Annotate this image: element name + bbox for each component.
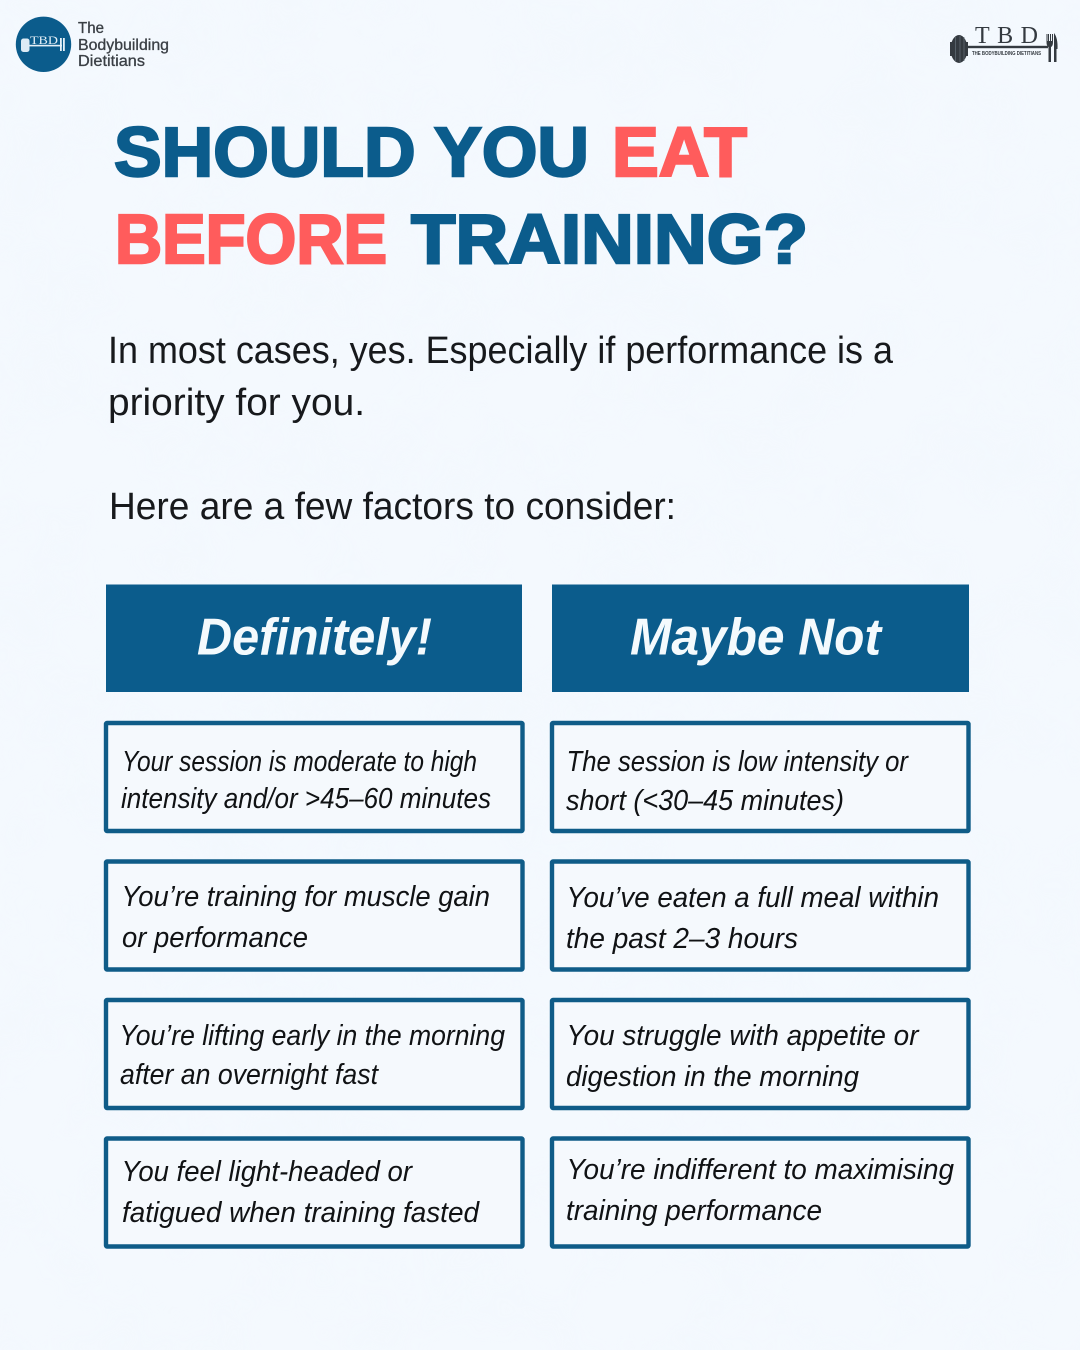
card: lifting early in the morning: after an overnight fast bbox=[120, 1059, 380, 1091]
card: low intensity or short bbox=[552, 723, 968, 831]
logo: TBD barbell wordmark: TBD bbox=[975, 23, 1038, 49]
card: light-headed or fatigued: fatigued when training fasted bbox=[122, 1197, 480, 1229]
lead-in line: Here are a few factors to consider: bbox=[109, 486, 676, 528]
title: EAT bbox=[612, 113, 747, 191]
logo: TBD barbell wordmark: THE BODYBUILDING DIETITIANS bbox=[972, 51, 1041, 57]
column header: Definitely!: Definitely! bbox=[197, 608, 432, 666]
logo: The Bodybuilding Dietitians badge: Dietitians bbox=[78, 53, 145, 70]
card: appetite or digestion bbox=[552, 1000, 968, 1108]
card: moderate to high intensity bbox=[106, 723, 522, 831]
title bbox=[114, 113, 808, 278]
column header: Maybe Not bbox=[552, 584, 969, 692]
card: appetite or digestion: You struggle with appetite or bbox=[566, 1020, 920, 1052]
card: low intensity or short: The session is low intensity or bbox=[566, 746, 909, 778]
logo: The Bodybuilding Dietitians badge: Bodybuilding bbox=[78, 37, 169, 54]
card: low intensity or short: short (<30–45 minutes) bbox=[566, 785, 844, 817]
card: eaten a full meal: You’ve eaten a full meal within bbox=[566, 882, 939, 914]
card: light-headed or fatigued bbox=[106, 1138, 522, 1246]
card: eaten a full meal bbox=[552, 862, 968, 970]
card: muscle gain or performance: or performance bbox=[122, 922, 308, 954]
card: muscle gain or performance bbox=[106, 862, 522, 970]
card: indifferent to performance: training performance bbox=[566, 1195, 822, 1227]
card: lifting early in the morning: You’re lifting early in the morning bbox=[120, 1020, 505, 1052]
card: indifferent to performance: You’re indifferent to maximising bbox=[566, 1154, 954, 1186]
logo: The Bodybuilding Dietitians badge: The bbox=[78, 20, 104, 37]
title: SHOULD YOU bbox=[114, 113, 589, 191]
card: muscle gain or performance: You’re training for muscle gain bbox=[122, 881, 490, 913]
card: appetite or digestion: digestion in the morning bbox=[566, 1061, 859, 1093]
title: BEFORE bbox=[115, 200, 387, 278]
intro paragraph: In most cases, yes. Especially if performance is a bbox=[108, 330, 894, 372]
logo: TBD barbell wordmark bbox=[950, 23, 1058, 63]
card: moderate to high intensity: intensity and/or >45–60 minutes bbox=[121, 783, 491, 815]
intro paragraph bbox=[108, 330, 894, 424]
card: lifting early in the morning bbox=[106, 1000, 522, 1108]
column header: Maybe Not: Maybe Not bbox=[630, 608, 884, 666]
logo: The Bodybuilding Dietitians badge bbox=[16, 17, 169, 72]
intro paragraph: priority for you. bbox=[108, 382, 365, 424]
card: indifferent to performance bbox=[552, 1138, 968, 1246]
title: TRAINING? bbox=[411, 200, 808, 278]
card: moderate to high intensity: Your session is moderate to high bbox=[122, 746, 477, 778]
logo: The Bodybuilding Dietitians badge: TBD bbox=[30, 33, 58, 47]
card: eaten a full meal: the past 2–3 hours bbox=[566, 923, 798, 955]
column header: Definitely! bbox=[106, 584, 522, 692]
card: light-headed or fatigued: You feel light-headed or bbox=[122, 1156, 413, 1188]
